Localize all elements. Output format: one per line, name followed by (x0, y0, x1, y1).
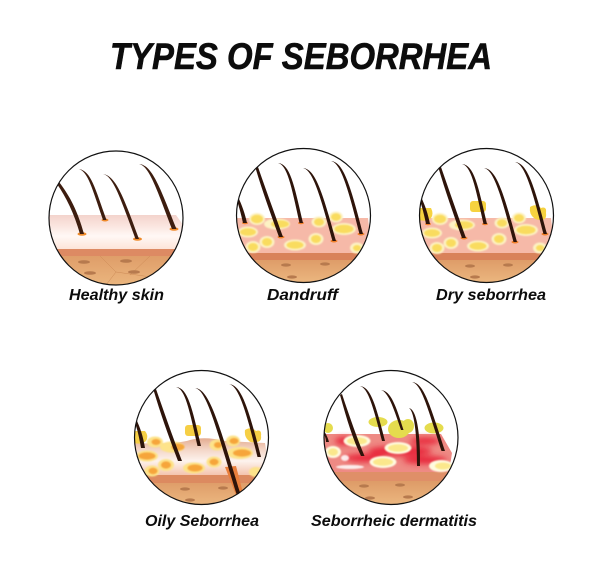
inflamed red patches (335, 437, 447, 464)
scale patches (325, 435, 453, 472)
skin cross-section (324, 382, 452, 504)
label: Dandruff (267, 287, 340, 304)
circle outline (49, 151, 183, 285)
label: Healthy skin (69, 287, 164, 304)
title: TYPES OF SEBORRHEA (110, 36, 492, 77)
panel: seborrheic dermatitis (311, 370, 477, 530)
deep hair root sheath (225, 466, 243, 495)
panel: healthy skin (48, 150, 188, 304)
dandruff flakes (238, 212, 364, 254)
skin cross-section (50, 164, 182, 284)
oily patches (136, 436, 263, 477)
hair-shaft yellow scales (323, 417, 444, 438)
panel: dry seborrhea (419, 148, 555, 304)
circle outline (420, 148, 554, 282)
label: Dry seborrhea (436, 287, 546, 304)
skin cross-section (135, 384, 266, 504)
circle outline (134, 370, 268, 504)
scale patches (422, 212, 547, 254)
label: Seborrheic dermatitis (311, 513, 477, 530)
hair-shaft scales (419, 201, 546, 221)
skin cross-section (237, 161, 369, 282)
label: Oily Seborrhea (145, 513, 259, 530)
circle outline (324, 370, 458, 504)
hair-shaft scales (134, 425, 261, 444)
panel: dandruff (236, 148, 372, 304)
circle outline (236, 148, 370, 282)
panel: oily seborrhea (134, 370, 270, 530)
skin cross-section (420, 162, 552, 282)
